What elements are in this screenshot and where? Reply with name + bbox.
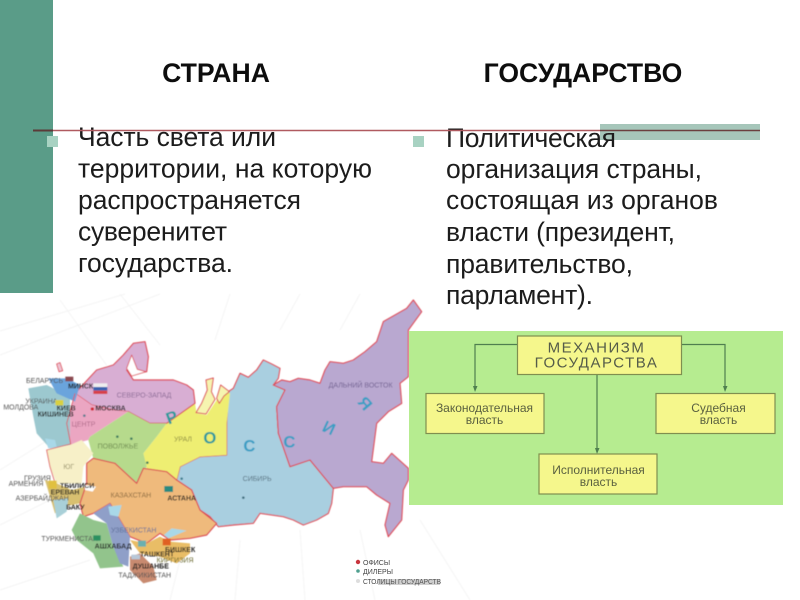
map of Russia and neighbouring countries: ДУШАНБЕ (133, 564, 169, 571)
map legend: ОФИСЫ (363, 560, 390, 567)
labels on regions: ТАДЖИКИСТАН (118, 573, 171, 580)
region: Ukraine (28, 385, 70, 448)
text block: state definition: власти (президент, (446, 217, 675, 247)
region: Kyrgyzstan (130, 537, 190, 563)
text block: state definition: парламент). (446, 280, 593, 310)
region: Caucasus (45, 480, 95, 513)
labels on regions: МОЛДОВА (3, 404, 39, 411)
box: mechanism of the state (518, 336, 682, 374)
left green side panel (0, 0, 53, 293)
map of Russia and neighbouring countries: КИШИНЕВ (38, 412, 74, 419)
region: Kazakhstan (80, 458, 217, 543)
text block: country definition: распространяется (78, 185, 301, 215)
labels on regions: УРАЛ (174, 437, 192, 444)
region: Tajikistan (130, 553, 157, 583)
labels on regions: АРМЕНИЯ (9, 481, 43, 488)
map legend: ДИЛЕРЫ (363, 569, 393, 576)
bullet: left (47, 136, 58, 147)
labels on regions: АЗЕРБАЙДЖАН (16, 494, 69, 503)
labels on regions: ЦЕНТР (72, 422, 96, 429)
labels on regions: КАЗАХСТАН (111, 492, 151, 499)
map of Russia and neighbouring countries: МОСКВА (95, 406, 126, 413)
large letters РОССИЯ (163, 393, 376, 456)
map of Russia and neighbouring countries: АСТАНА (167, 496, 196, 503)
large letters РОССИЯ: С (243, 437, 255, 456)
region: North-West (75, 342, 195, 423)
map of Russia and neighbouring countries (0, 294, 470, 600)
box: judicial: власть (700, 413, 737, 427)
text block: state definition (446, 123, 718, 310)
text block: state definition: организация страны, (446, 154, 702, 184)
labels on regions: ТУРКМЕНИСТАН (41, 536, 98, 543)
Yamal coast (196, 378, 215, 414)
box: judicial: Судебная (691, 401, 746, 415)
text block: country definition: территории, на которую (78, 154, 372, 184)
box: judicial (656, 394, 775, 434)
map of Russia and neighbouring countries: ТАШКЕНТ (140, 552, 175, 559)
bullet: right (413, 136, 424, 147)
box: legislative: Законодательная (436, 401, 533, 415)
labels on regions: УЗБЕКИСТАН (111, 528, 156, 535)
map of Russia and neighbouring countries: КИЕВ (57, 406, 76, 413)
region: Belarus (48, 378, 80, 402)
Black sea coast (85, 485, 96, 492)
region: Siberia (177, 360, 333, 527)
large letters РОССИЯ: Р (163, 407, 180, 428)
map of Russia and neighbouring countries: ТБИЛИСИ (60, 483, 94, 490)
box: legislative: власть (466, 413, 503, 427)
box: mechanism of the state: ГОСУДАРСТВА (535, 354, 658, 372)
arrows from the main box (475, 344, 725, 450)
box: executive: власть (580, 475, 617, 489)
region: Azerbaijan (53, 498, 68, 518)
text block: country definition: государства. (78, 248, 233, 278)
region: Far East (273, 300, 422, 537)
box: executive: Исполнительная (552, 463, 645, 477)
region: Ural (143, 390, 230, 480)
White Sea (127, 355, 146, 376)
labels on regions: БЕЛАРУСЬ (26, 378, 63, 385)
heading rule (33, 130, 760, 132)
map of Russia and neighbouring countries: МИНСК (68, 384, 94, 391)
heading: country: СТРАНА (162, 58, 270, 88)
large letters РОССИЯ: О (203, 428, 216, 447)
map of Russia and neighbouring countries: ЕРЕВАН (51, 490, 79, 497)
flags and markers (49, 377, 245, 559)
labels on regions: ПОВОЛЖЬЕ (98, 443, 139, 450)
labels on regions: СИБИРЬ (243, 476, 272, 483)
decorative bar at right of heading line (600, 124, 760, 140)
map legend: СТОЛИЦЫ ГОСУДАРСТВ (363, 579, 441, 586)
box: executive (539, 454, 657, 494)
labels on regions: ГРУЗИЯ (24, 475, 51, 482)
box: legislative (426, 394, 544, 434)
region: Centre (67, 393, 128, 445)
text block: state definition: Политическая (446, 123, 616, 153)
region: Uzbekistan (93, 503, 130, 567)
text block: country definition: суверенитет (78, 216, 227, 246)
region: Turkmenistan (72, 513, 123, 568)
map legend (356, 560, 441, 586)
labels on regions: ДАЛЬНИЙ ВОСТОК (329, 380, 393, 389)
region: Volga (88, 412, 167, 483)
labels on regions: УКРАИНА (25, 399, 58, 406)
labels on regions: КИРГИЗИЯ (157, 558, 194, 565)
text block: state definition: состоящая из органов (446, 185, 718, 215)
map of Russia and neighbouring countries: АШХАБАД (95, 544, 131, 551)
text block: country definition: Часть света или (78, 122, 276, 152)
labels on regions: СЕВЕРО-ЗАПАД (117, 392, 172, 399)
large letters РОССИЯ: И (319, 417, 338, 439)
region: South (47, 440, 93, 483)
heading: state: ГОСУДАРСТВО (484, 58, 682, 88)
box: mechanism of the state: МЕХАНИЗМ (548, 340, 645, 356)
large letters РОССИЯ: Я (354, 393, 376, 414)
map of Russia and neighbouring countries: БАКУ (66, 504, 85, 511)
large letters РОССИЯ: С (283, 432, 295, 451)
diagram: mechanism of the state (409, 331, 783, 505)
Western border (47, 393, 75, 483)
text block: country definition (78, 122, 372, 278)
Kaliningrad (57, 363, 63, 372)
text block: state definition: правительство, (446, 249, 633, 279)
labels on regions: ЮГ (63, 464, 74, 471)
map of Russia and neighbouring countries: БИШКЕК (165, 547, 196, 554)
labels on regions (3, 378, 393, 580)
lakes and seas (45, 438, 187, 538)
